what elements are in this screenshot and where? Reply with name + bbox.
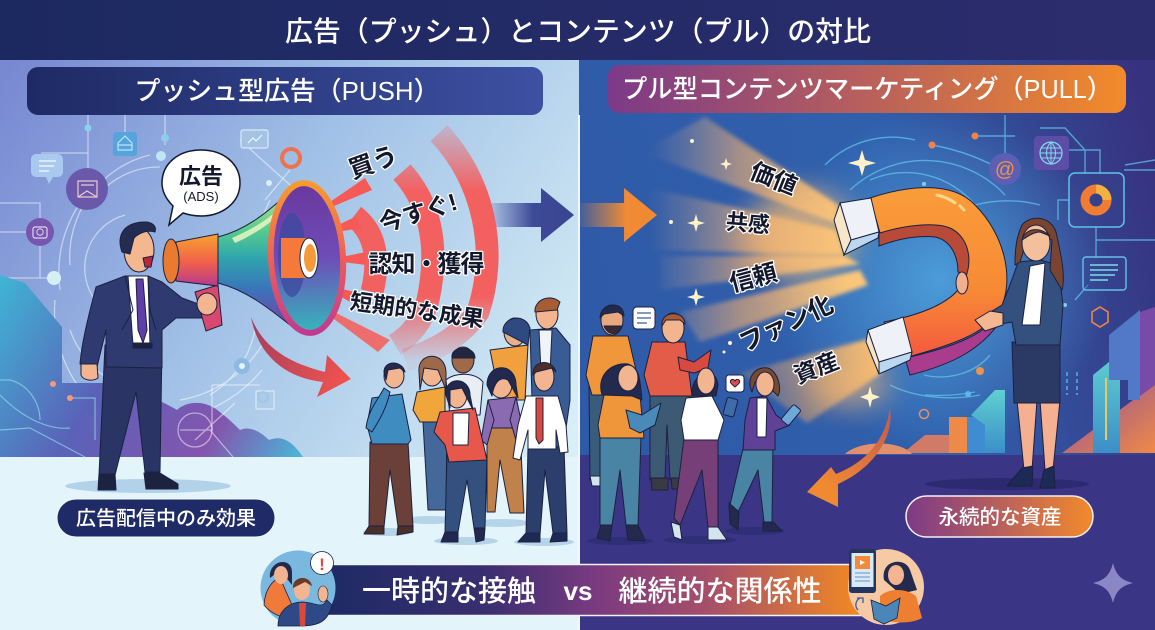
icon: orange ring [282, 149, 300, 167]
icon: camera circle [26, 218, 54, 246]
person: white shirt back [446, 347, 483, 415]
icon: phone [723, 397, 738, 417]
heading band: title bar: 広告（プッシュ）とコンテンツ（プル）の対比 [285, 16, 871, 47]
divider [578, 115, 580, 630]
heading: push header [27, 67, 543, 115]
heading: pull header: プル型コンテンツマーケティング（PULL） [622, 74, 1112, 104]
figure: businessman speaking [65, 222, 231, 493]
icon: chart tile [241, 130, 268, 148]
text: push keywords: 買う [345, 141, 402, 185]
icon: at sign circle: @ [995, 159, 1015, 181]
icon: at sign circle [989, 153, 1021, 185]
background: pull city skyline [845, 307, 1155, 454]
pill: effect only during ads [57, 499, 275, 537]
icon: red spikes from megaphone [306, 178, 390, 352]
background: pull tech network [825, 115, 1155, 418]
person: bearded man in orange [586, 305, 636, 486]
callout: ads speech bubble: (ADS) [183, 189, 219, 204]
banner: temporary vs continuous: vs [564, 576, 592, 606]
person: blue sweater [363, 363, 413, 536]
person: woman in orange [587, 364, 653, 545]
figure: businesswoman holding magnet [925, 218, 1089, 490]
background: push mountain and clouds [0, 275, 303, 457]
figure: audience group (push) [363, 298, 574, 546]
arrow: orange arrow into pull [580, 188, 657, 242]
icon: image circle [66, 168, 108, 210]
person: red blazer [434, 381, 498, 545]
icon: light beam fan [640, 117, 890, 423]
callout: ads speech bubble [162, 150, 240, 225]
icon: worried people circle: ! [319, 555, 325, 574]
person: woman in white sweater [663, 368, 737, 544]
icon: chat bubble [31, 154, 63, 184]
icon: home tile [113, 132, 137, 156]
text: pull keywords: 資産 [790, 347, 843, 389]
person: yellow top with long hair [405, 356, 455, 524]
icon: blue book [626, 403, 661, 433]
background: push tech network [0, 115, 290, 420]
chart: red sound waves [354, 133, 487, 360]
text: pull keywords [725, 158, 843, 389]
pill: lasting asset: 永続的な資産 [938, 506, 1062, 529]
banner: temporary vs continuous [327, 564, 862, 616]
heading: pull header [608, 65, 1126, 113]
figure: fans group (pull) [586, 305, 801, 545]
text: pull keywords: 信頼 [727, 259, 780, 298]
banner: temporary vs continuous: 継続的な関係性 [618, 575, 822, 608]
text: push keywords: 今すぐ! [376, 189, 461, 238]
person: yellow top back [490, 318, 530, 400]
person: woman in purple blazer [725, 368, 790, 535]
arrow: orange curved arrow to fans [807, 407, 891, 507]
person: man in red sweater [644, 313, 692, 490]
text: pull keywords: ファン化 [735, 290, 838, 358]
text: push keywords: 認知・獲得 [368, 251, 484, 278]
icon: donut chart frame [1069, 173, 1124, 227]
panel: pull background [579, 60, 1155, 630]
icon: megaphone [163, 181, 347, 335]
icon: sparkles [669, 139, 880, 408]
pill: lasting asset [906, 496, 1093, 537]
person: white shirt with tie [513, 363, 574, 546]
icon: decorative four-point star [1093, 563, 1133, 603]
icon: heart note [726, 375, 744, 392]
person: blue jacket back [530, 298, 570, 470]
icon: worried people circle [260, 550, 336, 626]
icon: tablet [781, 404, 801, 426]
text: pull keywords: 共感 [725, 209, 771, 238]
pill: effect only during ads: 広告配信中のみ効果 [76, 507, 256, 530]
icon: document card [1083, 257, 1126, 290]
icon: globe tile [1034, 136, 1069, 170]
arrow: red curved arrow to audience [251, 317, 351, 397]
heading band: title bar [0, 0, 1155, 60]
icon: reader with phone circle [848, 549, 924, 625]
panel: push background [0, 60, 579, 630]
icon: chat note [633, 307, 655, 329]
banner: temporary vs continuous: 一時的な接触 [362, 575, 536, 608]
icon: hexagon [1092, 307, 1108, 327]
callout: ads speech bubble: 広告 [179, 164, 223, 189]
text: push keywords [345, 141, 486, 332]
icon: magnet [834, 188, 1007, 375]
arrow: push to pull dark arrow [483, 188, 574, 242]
icon: red book [678, 350, 711, 373]
heading: push header: プッシュ型広告（PUSH） [134, 76, 440, 106]
background: push gear and tech lines [178, 358, 274, 457]
person: purple top [474, 368, 530, 527]
text: pull keywords: 価値 [746, 158, 801, 201]
text: push keywords: 短期的な成果 [348, 289, 486, 332]
